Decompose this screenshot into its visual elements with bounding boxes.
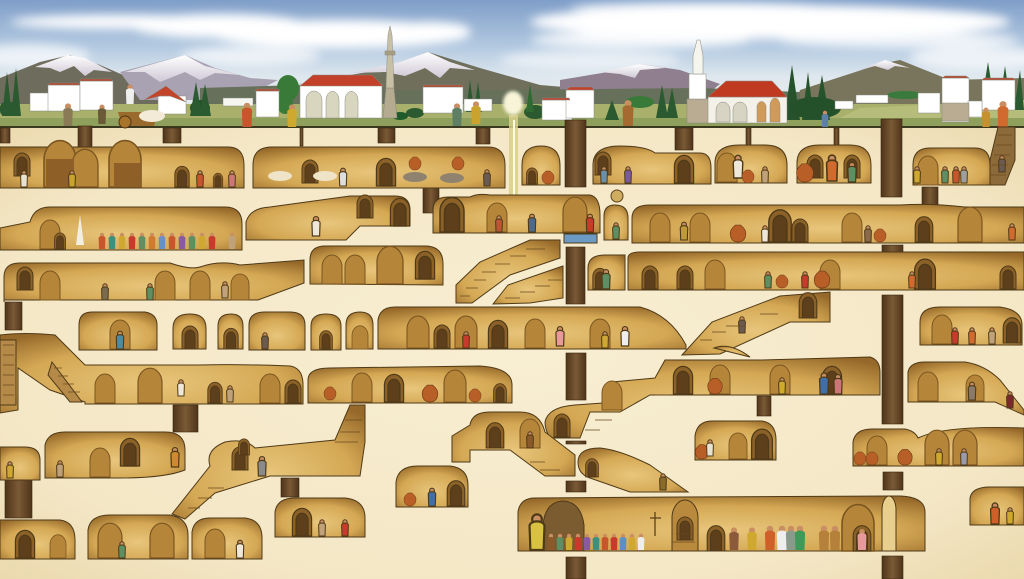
level 2 chambers [0,194,1024,250]
sky [0,0,1024,125]
ground strip [0,100,1024,128]
chamber: well level [433,194,600,233]
background: soil [0,120,1024,579]
light shaft [503,91,523,230]
level 5 chambers [0,334,1024,438]
chamber: church hall [518,496,925,551]
chamber: twin vault [452,412,575,476]
chamber: southeast [970,487,1024,525]
level 6 chambers [0,405,1024,519]
village buildings [30,26,1015,123]
level 4 chambers [79,292,1022,357]
chamber: south room two [192,518,262,559]
sloped stair gallery [682,292,830,355]
chamber: grain room [275,498,365,537]
coin stone near well [611,190,623,202]
chamber: southwest [0,520,75,559]
chamber: entry room [588,255,625,290]
stairway tunnel lower [493,266,563,304]
chamber: gathering room with stairs [913,127,1015,185]
chamber: jars room [797,145,871,183]
pool under well [564,234,597,243]
chamber: long hall [632,204,1024,243]
minaret [383,88,397,118]
chamber: sloped dead-end [578,448,688,492]
west alcove [0,447,40,480]
level 7 chambers [0,487,1024,559]
chamber: east gallery [853,427,1024,466]
chamber: well room [593,146,711,184]
chamber: carved rooms [45,432,185,478]
chamber: long gallery [628,252,1024,290]
trees [0,62,1024,120]
mosque [300,84,382,118]
chamber: cells row [79,312,373,350]
chamber: sloped tunnel [246,195,410,240]
congregation [548,526,866,550]
level 1 chambers [0,127,1015,188]
right houses [835,101,853,109]
chamber: narrow room [604,205,628,240]
vertical shafts [0,119,938,579]
church [687,99,709,123]
chamber: small store [522,146,560,185]
snow caps [35,52,910,82]
chamber: east slope [908,362,1024,415]
chamber: long vault [378,307,686,349]
level 3 chambers [4,240,1024,304]
priest [530,514,544,550]
chamber: east rooms [920,307,1022,345]
chamber: small store [695,421,776,460]
chamber: congregation [0,207,242,250]
middle houses [423,87,463,113]
left houses [30,93,54,111]
small arch [714,346,750,357]
cross [650,512,661,536]
chamber: stables and mill [253,147,505,188]
mountains [0,52,1024,125]
chamber: potter room [715,145,787,183]
chamber: south rooms [88,515,188,559]
chamber: stepped gallery [545,357,880,438]
chamber: pottery vault [308,366,512,403]
chamber: workshop [4,260,304,302]
surface figures and ox cart [63,85,1008,128]
chamber: staircase gallery [0,334,303,413]
stairway tunnel [456,240,560,303]
clouds [0,2,1024,70]
sloping tunnel [172,405,365,519]
chamber: jars [396,466,468,507]
chamber: storerooms [0,141,244,188]
chamber: upper hall [310,246,443,285]
stair hatching [3,135,1012,542]
